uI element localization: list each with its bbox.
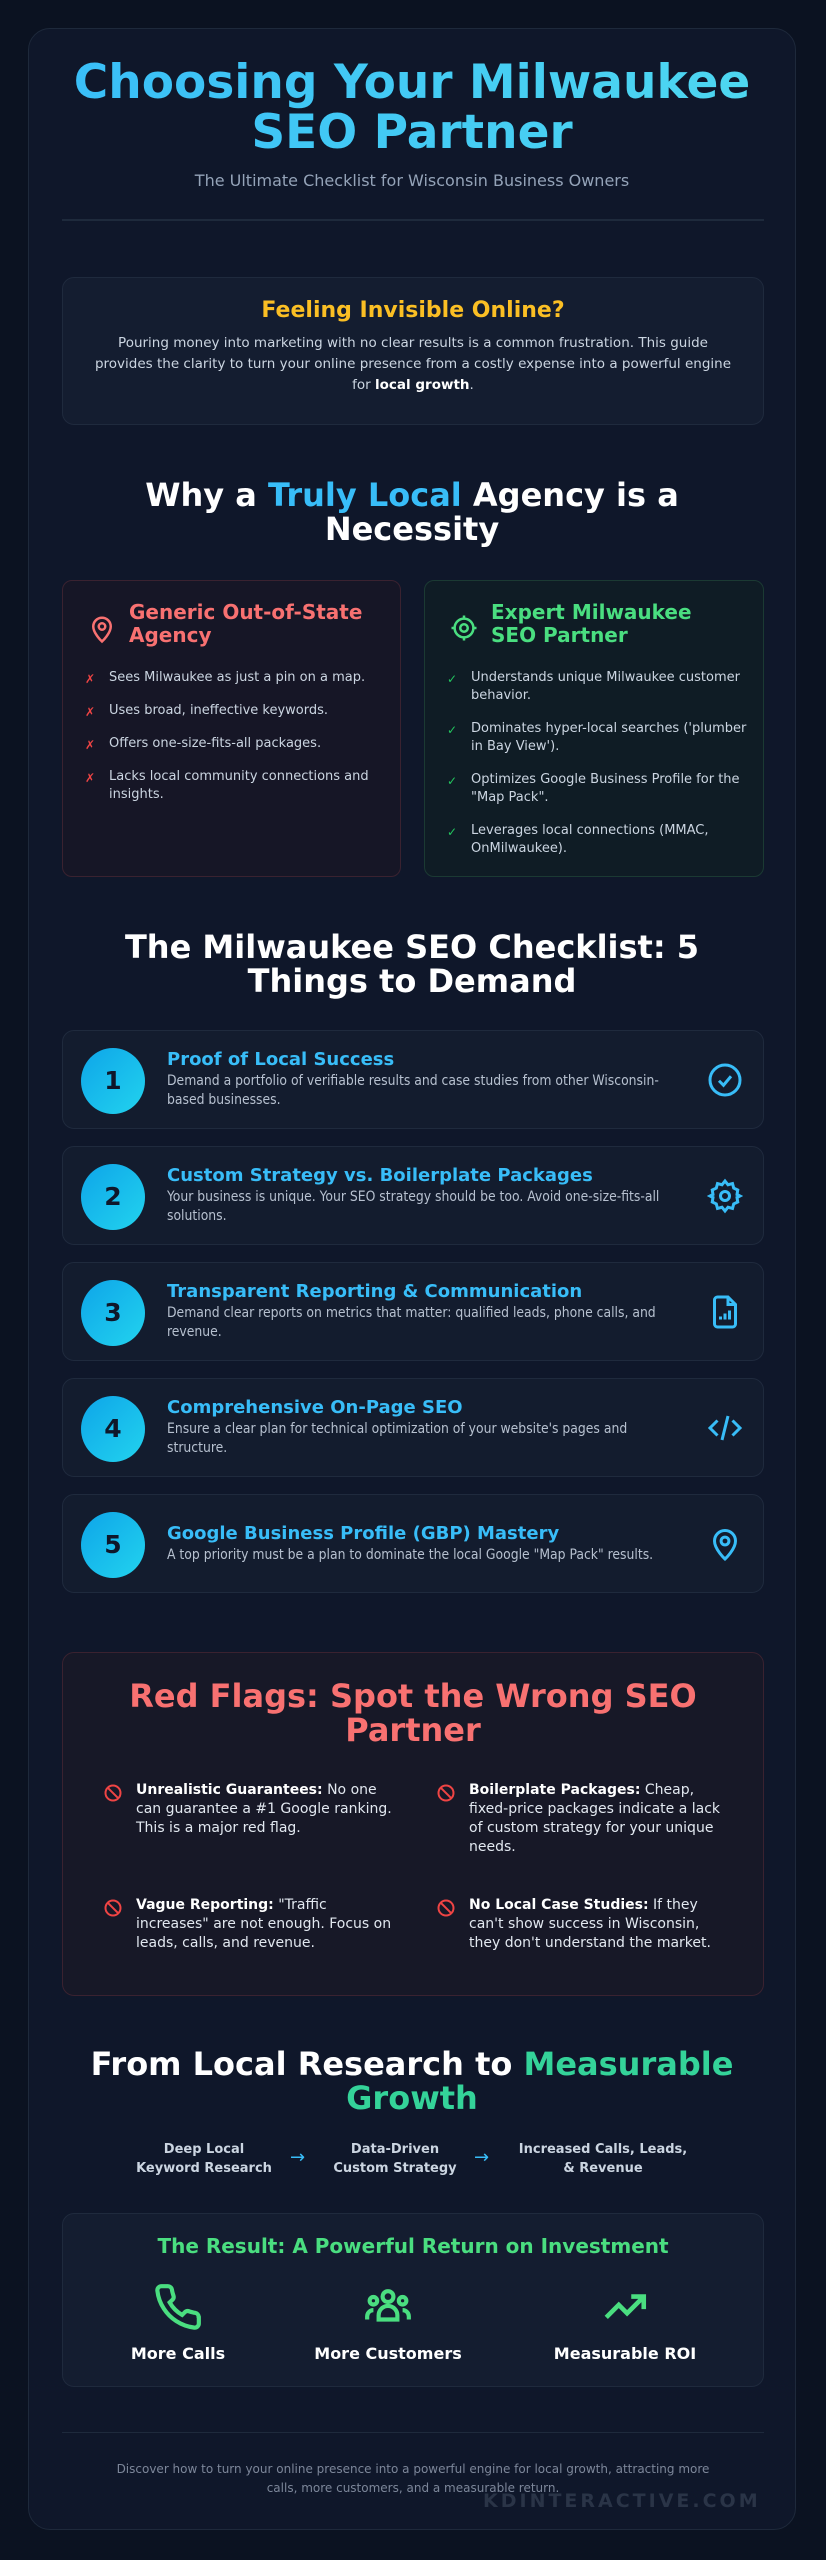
checklist item 1 [62, 1030, 764, 1129]
checklist item 4: 4 [104, 1414, 122, 1443]
heading: result: The Result: A Powerful Return on Investment [157, 2234, 669, 2258]
list: generic: Lacks local community connections and insights. [109, 769, 369, 802]
result: more calls [131, 2284, 225, 2363]
checklist item 1: 1 [104, 1066, 122, 1095]
list: expert: Dominates hyper-local searches ('plumber in Bay View'). [471, 721, 746, 754]
list: expert: ✓ [447, 672, 457, 686]
icon: gear [707, 1178, 743, 1214]
checklist item 5: A top priority must be a plan to dominate the local Google "Map Pack" results. [167, 1547, 653, 1563]
step 2 [333, 2142, 457, 2176]
list: generic: ✗ [85, 672, 95, 686]
flow: process steps [136, 2142, 687, 2176]
checklist item 5: Google Business Profile (GBP) Mastery [167, 1523, 559, 1544]
list: generic: ✗ [85, 738, 95, 752]
heading: generic: Agency [129, 623, 212, 647]
text: intro: provides the clarity to turn your online presence from a costly expense into a powerful engine [95, 356, 731, 372]
list: expert: ✓ [447, 774, 457, 788]
list: expert: Understands unique Milwaukee customer behavior. [471, 670, 740, 703]
list: expert: Leverages local connections (MMAC, OnMilwaukee). [471, 823, 709, 856]
icon: target green [452, 616, 476, 640]
checklist item 1: Proof of Local Success [167, 1049, 394, 1070]
text: intro [95, 335, 731, 393]
icon: map pin red [92, 616, 112, 644]
arrow: → [474, 2147, 489, 2168]
flag: no local case studies: No Local Case Studies: If they can't show success in Wisconsin, they don't understand the market. [469, 1897, 711, 1951]
heading: why local: Necessity [325, 510, 499, 548]
panel: expert milwaukee [424, 580, 764, 877]
step 3 [519, 2142, 687, 2176]
list: generic: ✗ [85, 771, 95, 785]
heading: checklist: Things to Demand [248, 962, 576, 1000]
title [74, 55, 750, 160]
step 2: Custom Strategy [333, 2161, 457, 2176]
heading: expert: SEO Partner [491, 623, 628, 647]
flag: unrealistic guarantees: Unrealistic Guarantees: No one can guarantee a #1 Google ranking. This is a major red flag. [136, 1782, 392, 1836]
icon: check circle [708, 1064, 742, 1096]
list: expert: ✓ [447, 825, 457, 839]
result: measurable roi: Measurable ROI [554, 2344, 696, 2363]
text: intro: for local growth. [352, 377, 474, 393]
arrow: → [290, 2147, 305, 2168]
icon: report doc [713, 1296, 737, 1328]
checklist item 4: Ensure a clear plan for technical optimization of your website's pages and structure. [167, 1421, 627, 1456]
checklist item 3: Demand clear reports on metrics that matter: qualified leads, phone calls, and revenue. [167, 1305, 656, 1340]
panel: result [62, 2213, 764, 2387]
step 1: Deep Local [164, 2142, 244, 2157]
list: expert [447, 670, 746, 856]
icon: code [708, 1416, 742, 1440]
heading: expert: Expert Milwaukee [491, 600, 692, 624]
list: generic: Offers one-size-fits-all packages. [109, 736, 321, 751]
subtitle: The Ultimate Checklist for Wisconsin Business Owners [195, 171, 629, 190]
heading: growth [91, 2045, 733, 2117]
result: measurable roi [554, 2294, 696, 2363]
heading: generic [129, 600, 362, 647]
list: expert: ✓ [447, 723, 457, 737]
heading: red flags: Partner [345, 1711, 481, 1749]
checklist item 3: Transparent Reporting & Communication [167, 1281, 582, 1302]
result: more calls: More Calls [131, 2344, 225, 2363]
list: generic: Uses broad, ineffective keywords. [109, 703, 328, 718]
heading: generic: Generic Out-of-State [129, 600, 362, 624]
panel: feeling invisible [62, 277, 764, 425]
step 2: Data-Driven [351, 2142, 439, 2157]
checklist item 2 [62, 1146, 764, 1245]
result: more customers: More Customers [314, 2344, 462, 2363]
panel: generic agency [62, 580, 401, 877]
checklist item 3: 3 [104, 1298, 122, 1327]
checklist item 5: 5 [104, 1530, 122, 1559]
list: generic: Sees Milwaukee as just a pin on a map. [109, 670, 365, 685]
icon: map pin [713, 1529, 737, 1561]
text: intro: Pouring money into marketing with no clear results is a common frustration. This guide [118, 335, 708, 351]
heading: why local: Why a Truly Local Agency is a [145, 476, 679, 514]
footer text: Discover how to turn your online presence into a powerful engine for local growth, attracting more calls, more customers, and a measurable return. [117, 2462, 709, 2495]
heading: red flags [129, 1677, 697, 1749]
step 1: Keyword Research [136, 2161, 272, 2176]
step 3: & Revenue [563, 2161, 643, 2176]
list: expert: Optimizes Google Business Profile for the "Map Pack". [471, 772, 740, 805]
panel: red flags [62, 1652, 764, 1996]
heading: growth: Growth [346, 2079, 478, 2117]
heading: checklist [125, 928, 699, 1000]
heading: red flags: Red Flags: Spot the Wrong SEO [129, 1677, 697, 1715]
title: SEO Partner [251, 105, 573, 160]
step 3: Increased Calls, Leads, [519, 2142, 687, 2157]
checklist item 3 [62, 1262, 764, 1361]
watermark: KDINTERACTIVE.COM [483, 2490, 761, 2512]
heading: checklist: The Milwaukee SEO Checklist: 5 [125, 928, 699, 966]
flag: boilerplate packages: Boilerplate Packages: Cheap, fixed-price packages indicate a lack of custom strategy for your unique needs. [469, 1782, 720, 1855]
checklist item 5 [62, 1494, 764, 1593]
list: generic: ✗ [85, 705, 95, 719]
heading: growth: From Local Research to Measurable [91, 2045, 733, 2083]
heading: feeling invisible: Feeling Invisible Online? [261, 298, 565, 323]
checklist item 2: Custom Strategy vs. Boilerplate Packages [167, 1165, 593, 1186]
list: generic [85, 670, 369, 802]
title: Choosing Your Milwaukee [74, 55, 750, 110]
heading: expert [491, 600, 692, 647]
result: more customers [314, 2289, 462, 2363]
checklist item 2: 2 [104, 1182, 122, 1211]
checklist item 4 [62, 1378, 764, 1477]
step 1 [136, 2142, 272, 2176]
checklist item 2: Your business is unique. Your SEO strategy should be too. Avoid one-size-fits-all solutions. [167, 1189, 659, 1224]
heading: why local [145, 476, 679, 548]
checklist item 4: Comprehensive On-Page SEO [167, 1397, 463, 1418]
flag: vague reporting: Vague Reporting: "Traffic increases" are not enough. Focus on leads, calls, and revenue. [136, 1897, 391, 1951]
checklist item 1: Demand a portfolio of verifiable results and case studies from other Wisconsin-based businesses. [167, 1073, 659, 1108]
